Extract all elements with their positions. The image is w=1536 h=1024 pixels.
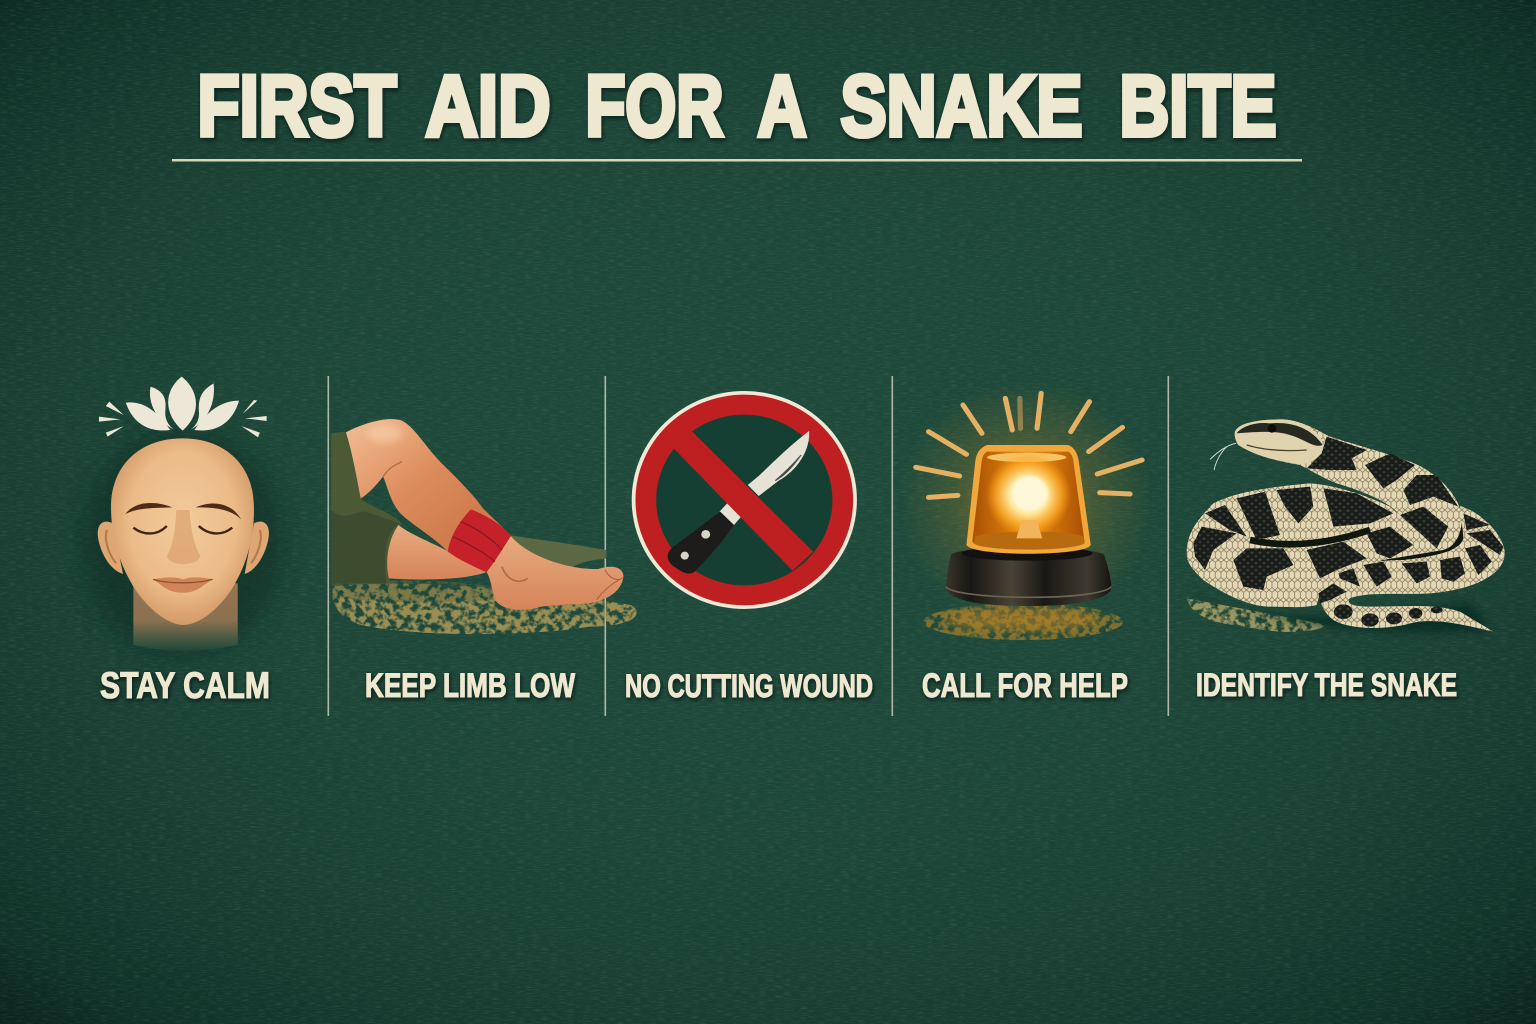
mouth bbox=[153, 577, 213, 593]
upper arc lower edge shadow bbox=[1250, 530, 1370, 544]
foot bbox=[486, 536, 623, 610]
label: stay calm: STAY CALM bbox=[100, 665, 270, 706]
ground patch bbox=[331, 584, 637, 634]
nose bbox=[167, 510, 201, 564]
amber dome bbox=[966, 445, 1091, 554]
title: A bbox=[758, 58, 806, 154]
title: AID bbox=[426, 58, 550, 154]
eyebrows bbox=[125, 503, 172, 514]
title: FIRST bbox=[198, 58, 396, 154]
sign disc bbox=[632, 391, 857, 609]
ground patch bbox=[1187, 598, 1327, 632]
title: FOR bbox=[586, 58, 724, 154]
label: no cutting wound: NO CUTTING WOUND bbox=[625, 668, 873, 704]
knife blade bbox=[748, 431, 809, 496]
label: keep limb low: KEEP LIMB LOW bbox=[365, 667, 576, 705]
lotus bbox=[126, 377, 239, 431]
icon: prohibited knife bbox=[632, 391, 857, 609]
upper leg bbox=[346, 419, 510, 553]
head shading bbox=[1235, 419, 1323, 464]
neck bbox=[133, 583, 238, 651]
tongue bbox=[1210, 443, 1236, 470]
label: identify the snake: IDENTIFY THE SNAKE bbox=[1196, 667, 1457, 703]
main body and neck bbox=[1187, 419, 1462, 607]
panel: identify the snake bbox=[1187, 419, 1505, 703]
light rays bbox=[916, 393, 1142, 497]
knife handle bbox=[668, 512, 734, 574]
bulb glow bbox=[985, 453, 1071, 537]
label: call for help: CALL FOR HELP bbox=[922, 667, 1128, 705]
calm rays bbox=[99, 400, 267, 437]
icon: coiled snake bbox=[1187, 419, 1505, 632]
head bbox=[111, 438, 254, 625]
dark bands bbox=[1193, 437, 1503, 627]
panel: call for help bbox=[899, 380, 1154, 705]
panel: stay calm bbox=[83, 377, 283, 706]
divider lines bbox=[328, 376, 1169, 716]
title: SNAKE bbox=[840, 58, 1082, 154]
title: BITE bbox=[1120, 58, 1276, 154]
prohibition slash bbox=[672, 429, 813, 571]
icon: warning beacon bbox=[899, 380, 1154, 640]
red bandage bbox=[448, 509, 511, 572]
ears bbox=[98, 522, 123, 574]
icon: calm face with lotus bbox=[83, 377, 283, 657]
closed eyes bbox=[133, 526, 167, 533]
panel: no cutting wound bbox=[625, 391, 873, 704]
title bbox=[198, 58, 1276, 154]
cloth under foot bbox=[507, 535, 606, 570]
coil shadow underlay bbox=[1213, 502, 1468, 590]
title rule bbox=[172, 159, 1302, 162]
shorts bbox=[331, 432, 402, 584]
lower leg bbox=[387, 525, 488, 579]
icon: leg with bandage bbox=[331, 419, 637, 634]
base bbox=[946, 547, 1111, 606]
panel: keep limb low bbox=[331, 419, 637, 705]
back coil and tail bbox=[1320, 506, 1505, 632]
